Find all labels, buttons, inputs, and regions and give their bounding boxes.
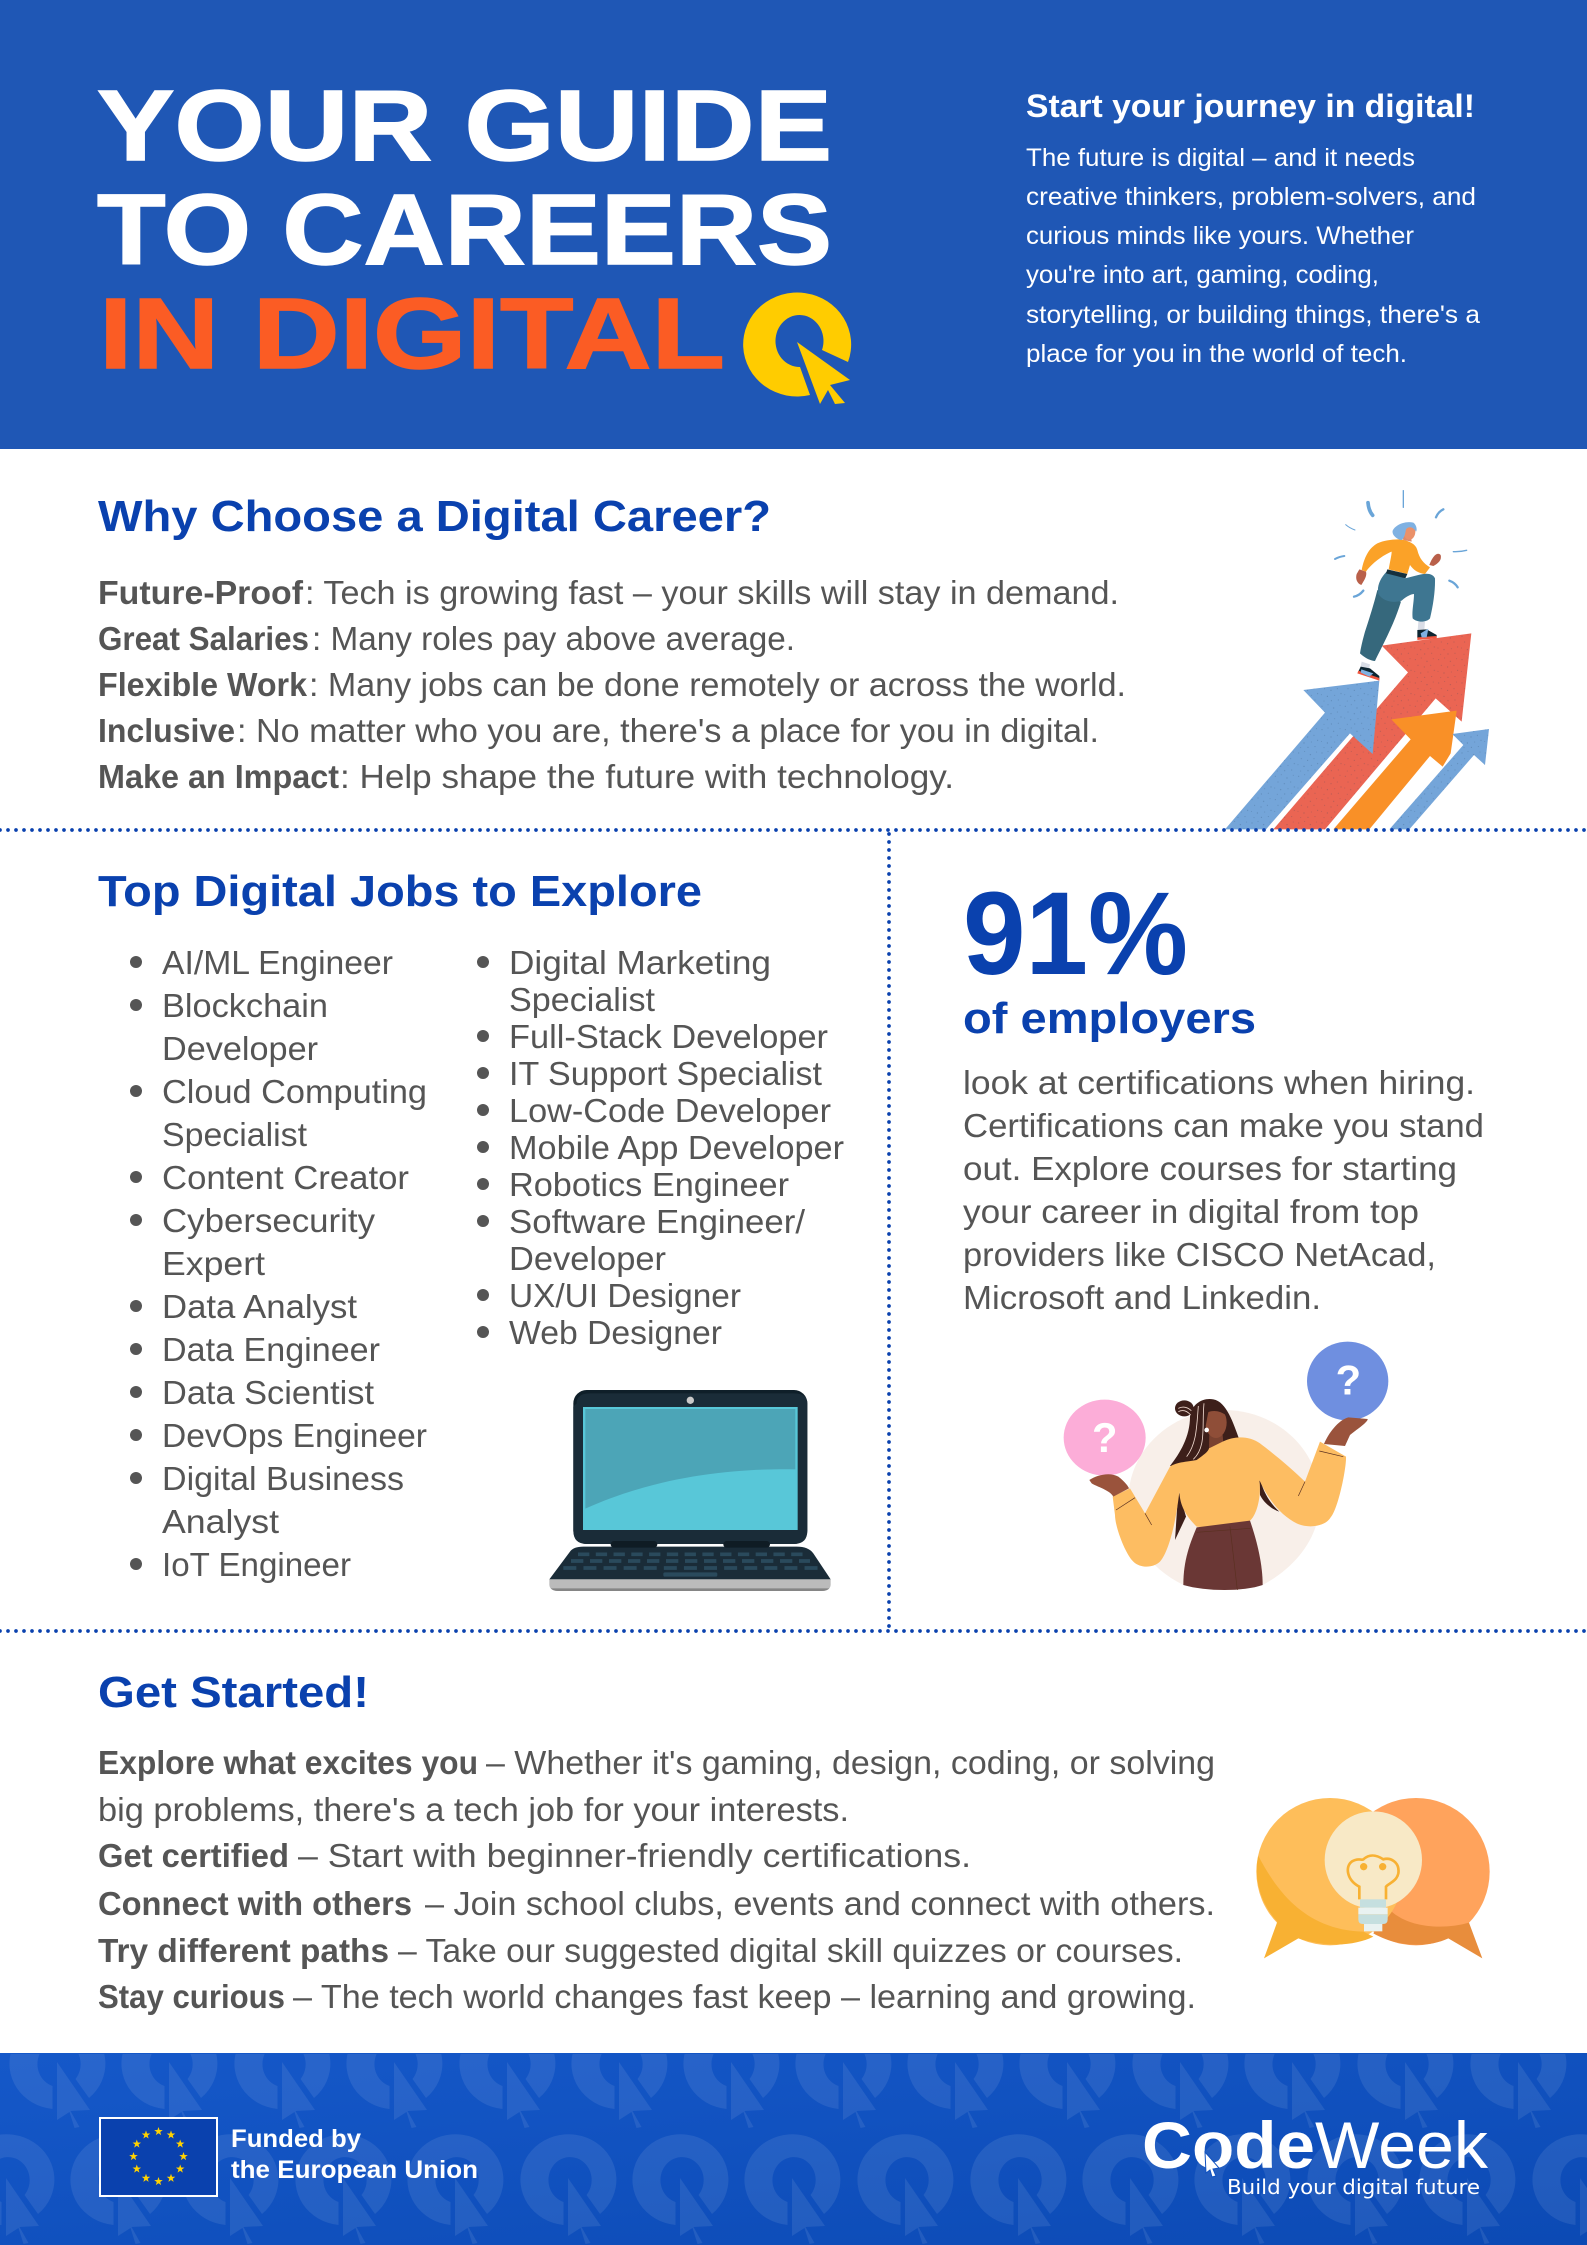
- intro text: storytelling, or building things, there's a: [1026, 301, 1480, 329]
- intro text: [1026, 88, 1480, 368]
- jobs list column 1: [130, 944, 427, 1583]
- heading: Top Digital Jobs to Explore: [98, 868, 702, 916]
- jobs list column 2: Full-Stack Developer: [509, 1018, 828, 1055]
- jobs list column 2: Low-Code Developer: [509, 1092, 831, 1129]
- action list: big problems, there's a tech job for your interests.: [98, 1791, 849, 1828]
- action list: – Whether it's gaming, design, coding, or solving: [486, 1744, 1215, 1781]
- divider: horizontal dotted bottom: [0, 1629, 1587, 1633]
- jobs list column 1: Digital Business: [162, 1460, 404, 1497]
- intro text: The future is digital – and it needs: [1026, 144, 1415, 172]
- jobs list column 1: Cybersecurity: [162, 1202, 376, 1239]
- jobs list column 1: Content Creator: [162, 1159, 409, 1196]
- benefits list: : Help shape the future with technology.: [340, 758, 954, 795]
- logo: CodeWeek: Build your digital future: [1227, 2175, 1480, 2199]
- illustration: speech bubbles with light bulb: [1256, 1798, 1490, 1958]
- illustration: woman with question bubbles: ?: [1092, 1414, 1117, 1461]
- certification text: look at certifications when hiring.: [963, 1064, 1475, 1101]
- certification text: Certifications can make you stand: [963, 1107, 1484, 1144]
- action list: Explore what excites you: [98, 1744, 478, 1781]
- action list: [98, 1744, 1215, 2015]
- jobs list column 2: Digital Marketing: [509, 944, 771, 981]
- funded by text: the European Union: [231, 2156, 478, 2184]
- jobs list column 1: AI/ML Engineer: [162, 944, 393, 981]
- logo: CodeWeek: [1142, 2108, 1489, 2199]
- heading: Get Started!: [98, 1669, 369, 1717]
- benefits list: : Many roles pay above average.: [312, 620, 795, 657]
- divider: horizontal dotted top: [0, 828, 1587, 832]
- benefits list: Future-Proof: [98, 574, 304, 611]
- illustration: laptop: [549, 1390, 831, 1591]
- action list: Get certified: [98, 1837, 289, 1874]
- jobs list column 1: Expert: [162, 1245, 265, 1282]
- title: IN DIGITAL: [99, 278, 725, 390]
- benefits list: Flexible Work: [98, 666, 308, 703]
- icon: EU flag: [100, 2118, 217, 2196]
- action list: – Start with beginner-friendly certifications.: [298, 1837, 971, 1874]
- panel: why choose a digital career: [98, 491, 1489, 829]
- jobs list column 2: IT Support Specialist: [509, 1055, 822, 1092]
- benefits list: : No matter who you are, there's a place for you in digital.: [237, 712, 1099, 749]
- logo: CodeWeek: Code: [1142, 2108, 1315, 2182]
- jobs list column 2: Mobile App Developer: [509, 1129, 844, 1166]
- divider: vertical dotted: [887, 834, 891, 1631]
- certification text: Microsoft and Linkedin.: [963, 1279, 1321, 1316]
- jobs list column 1: Analyst: [162, 1503, 279, 1540]
- jobs list column 1: Developer: [162, 1030, 318, 1067]
- funded by text: Funded by: [231, 2125, 361, 2153]
- big number: 91%: [963, 868, 1188, 1000]
- jobs list column 2: Software Engineer/: [509, 1203, 806, 1240]
- jobs list column 1: Data Engineer: [162, 1331, 380, 1368]
- benefits list: Inclusive: [98, 712, 235, 749]
- panel: get started: [98, 1669, 1490, 2015]
- benefits list: Make an Impact: [98, 758, 339, 795]
- action list: Connect with others: [98, 1885, 412, 1922]
- title: YOUR GUIDE: [97, 70, 832, 182]
- jobs list column 1: Specialist: [162, 1116, 307, 1153]
- logo: CodeWeek: Week: [1315, 2108, 1489, 2182]
- jobs list column 2: Developer: [509, 1240, 666, 1277]
- jobs list column 2: UX/UI Designer: [509, 1277, 741, 1314]
- illustration: woman climbing arrows: [1225, 491, 1489, 829]
- action list: Stay curious: [98, 1978, 285, 2015]
- action list: – The tech world changes fast keep – learning and growing.: [293, 1978, 1196, 2015]
- jobs list column 1: DevOps Engineer: [162, 1417, 427, 1454]
- panel: header banner: [0, 0, 1587, 449]
- action list: – Take our suggested digital skill quizzes or courses.: [398, 1932, 1183, 1969]
- title: TO CAREERS: [97, 174, 832, 286]
- heading: Why Choose a Digital Career?: [98, 493, 771, 541]
- jobs list column 1: IoT Engineer: [162, 1546, 351, 1583]
- benefits list: Great Salaries: [98, 620, 309, 657]
- icon: yellow Q cursor: [743, 292, 851, 404]
- intro text: creative thinkers, problem-solvers, and: [1026, 183, 1476, 211]
- benefits list: : Tech is growing fast – your skills will stay in demand.: [305, 574, 1119, 611]
- jobs list column 1: Cloud Computing: [162, 1073, 427, 1110]
- benefits list: [98, 574, 1126, 795]
- certification text: out. Explore courses for starting: [963, 1150, 1457, 1187]
- intro text: Start your journey in digital!: [1026, 88, 1475, 124]
- intro text: curious minds like yours. Whether: [1026, 222, 1414, 250]
- intro text: place for you in the world of tech.: [1026, 340, 1407, 368]
- panel: footer: [0, 2053, 1587, 2245]
- panel: 91 percent statistic: [963, 868, 1484, 1590]
- benefits list: : Many jobs can be done remotely or across the world.: [309, 666, 1126, 703]
- jobs list column 2: Robotics Engineer: [509, 1166, 789, 1203]
- jobs list column 2: Web Designer: [509, 1314, 722, 1351]
- illustration: woman with question bubbles: ?: [1336, 1357, 1361, 1404]
- jobs list column 2: [477, 944, 844, 1351]
- action list: Try different paths: [98, 1932, 389, 1969]
- illustration: woman with question bubbles: [1064, 1342, 1388, 1590]
- jobs list column 1: Blockchain: [162, 987, 328, 1024]
- sub-heading: of employers: [963, 995, 1256, 1043]
- action list: – Join school clubs, events and connect with others.: [425, 1885, 1215, 1922]
- intro text: you're into art, gaming, coding,: [1026, 261, 1379, 289]
- jobs list column 2: Specialist: [509, 981, 655, 1018]
- jobs list column 1: Data Analyst: [162, 1288, 357, 1325]
- certification text: [963, 1064, 1484, 1316]
- title: [97, 70, 832, 390]
- funded by text: [231, 2125, 478, 2184]
- panel: top digital jobs: [98, 868, 844, 1591]
- certification text: providers like CISCO NetAcad,: [963, 1236, 1436, 1273]
- certification text: your career in digital from top: [963, 1193, 1419, 1230]
- jobs list column 1: Data Scientist: [162, 1374, 374, 1411]
